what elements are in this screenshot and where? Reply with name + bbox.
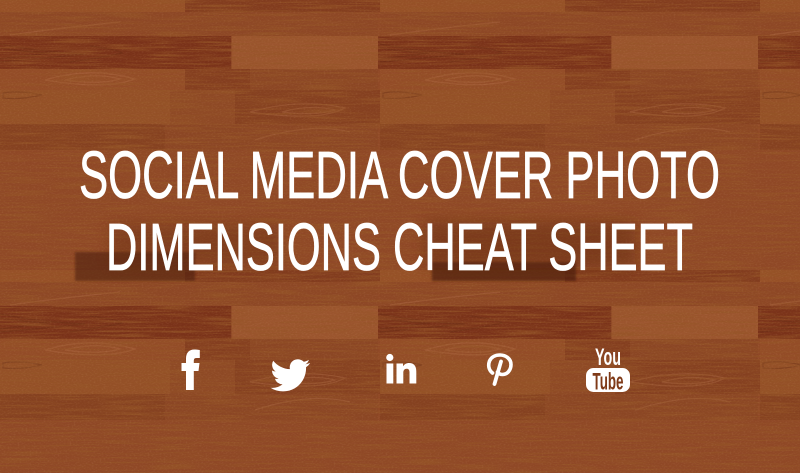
dark plank shadows behind title: [75, 222, 635, 281]
icon: facebook: [182, 350, 200, 390]
title: [79, 138, 720, 285]
icon: youtube: [586, 344, 630, 396]
icon: linkedin: [386, 354, 416, 384]
icon: youtube: Tube: [592, 368, 624, 396]
icon: youtube: You: [595, 344, 621, 371]
icon: pinterest: [489, 355, 511, 384]
icon: twitter: [270, 359, 310, 391]
social icons: [182, 344, 630, 396]
